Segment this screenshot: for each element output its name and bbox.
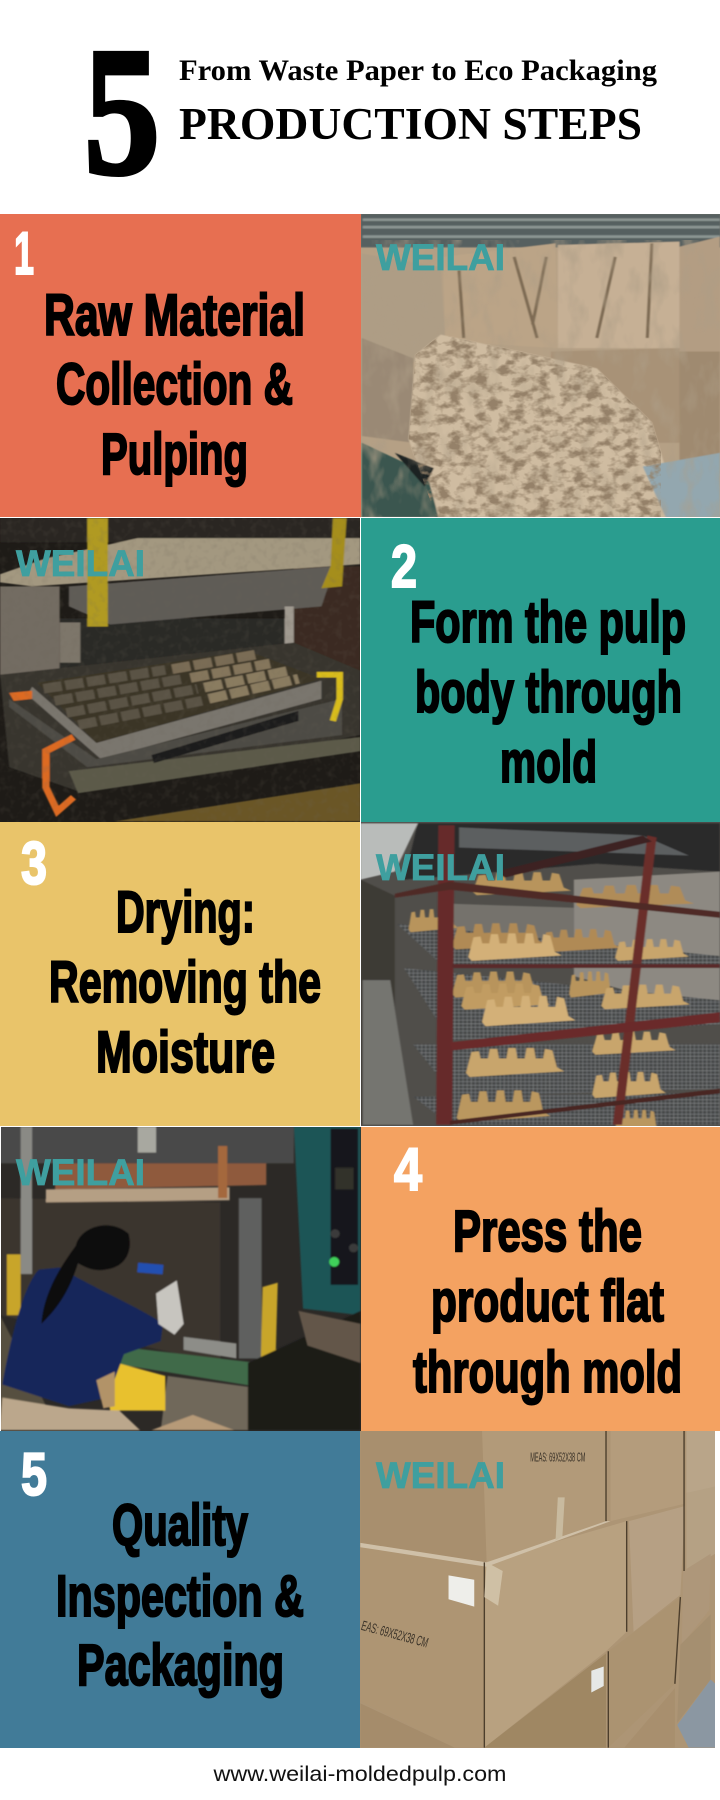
number 1: 1	[14, 220, 34, 287]
panel: step 3 text	[0, 822, 360, 1126]
heading step 3: Removing the	[49, 950, 321, 1015]
photo: waste paper bales	[360, 214, 720, 517]
logo WEILAI: WEILAI	[376, 1455, 505, 1496]
logo WEILAI: WEILAI	[376, 847, 505, 888]
heading step 1: Raw Material	[44, 283, 305, 348]
heading step 1	[44, 283, 305, 487]
heading step 5: Inspection &	[56, 1564, 304, 1629]
photo: drying racks	[360, 822, 720, 1133]
photo: stacked cartons: MEAS: 69X52X38 CM	[530, 1450, 585, 1465]
heading step 5	[56, 1493, 304, 1698]
number 2: 2	[391, 533, 417, 600]
panel: step 5 text	[0, 1431, 360, 1748]
photo: operator at hot press	[0, 1127, 361, 1431]
footer website: www.weilai-moldedpulp.com	[212, 1763, 507, 1786]
title block	[84, 10, 657, 213]
heading step 3: Moisture	[96, 1020, 275, 1085]
number 5: 5	[21, 1441, 47, 1508]
heading step 2	[410, 590, 686, 795]
photo: stacked cartons	[359, 1431, 715, 1748]
heading step 5: Packaging	[77, 1633, 284, 1698]
carton marking: EAS: 69X52X38 CM	[359, 1618, 430, 1651]
heading step 3	[49, 880, 321, 1085]
panel: step 2 text	[361, 518, 720, 822]
panel: step 4 text	[361, 1127, 720, 1431]
big numeral 5: 5	[84, 10, 160, 213]
number 3: 3	[21, 830, 47, 897]
heading step 1: Collection &	[56, 352, 293, 417]
heading step 1: Pulping	[101, 422, 248, 487]
logo WEILAI: WEILAI	[16, 1152, 145, 1193]
panel: step 1 text	[0, 214, 361, 517]
logo WEILAI: WEILAI	[376, 237, 505, 278]
heading step 4: Press the	[453, 1199, 642, 1264]
logo WEILAI: WEILAI	[16, 543, 145, 584]
heading step 3: Drying:	[116, 880, 255, 945]
photo: forming press	[0, 518, 360, 822]
subtitle: From Waste Paper to Eco Packaging	[179, 54, 657, 87]
heading step 4	[413, 1199, 682, 1405]
number 4: 4	[394, 1136, 423, 1203]
heading step 5: Quality	[112, 1493, 248, 1558]
heading step 2: mold	[500, 730, 597, 795]
main heading: PRODUCTION STEPS	[179, 99, 642, 149]
